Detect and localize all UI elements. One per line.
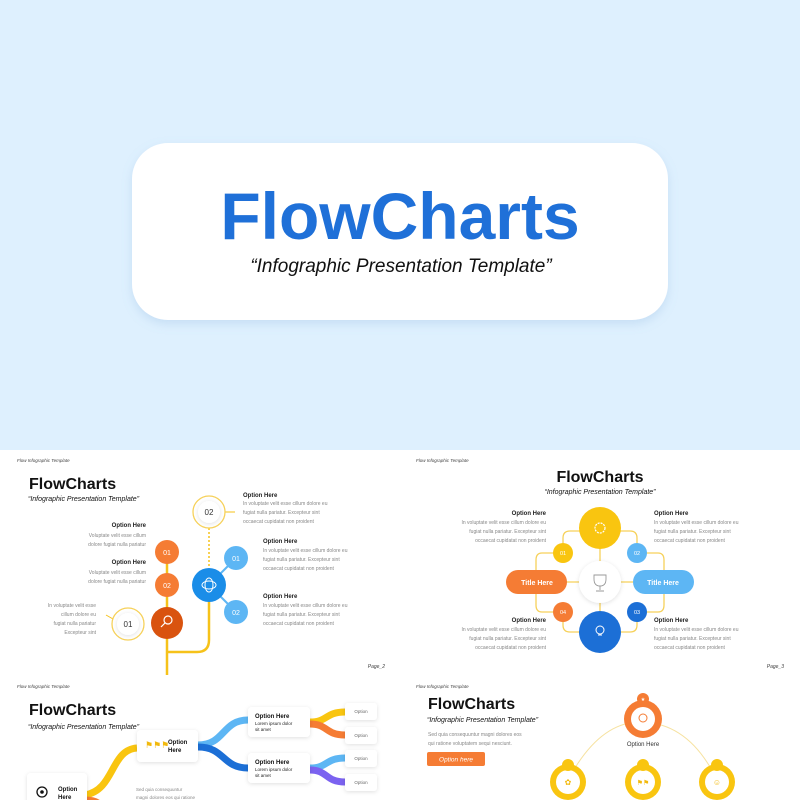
slide 2 text blocks: occaecat cupidatat non proident xyxy=(654,538,725,544)
box: left option: Option xyxy=(58,787,78,793)
slide 2: cycle flow: Page_3 xyxy=(767,664,784,670)
slide 2: cycle flow: “Infographic Presentation Template” xyxy=(544,489,656,496)
slide 2: cycle flow xyxy=(416,458,784,670)
numbered dots: 02 xyxy=(634,551,640,557)
numbered dots xyxy=(553,543,647,622)
slide 1 text blocks: In voluptate velit esse cillum dolore eu xyxy=(263,548,348,554)
circle 02 outline: 02 xyxy=(205,508,214,517)
hero title: FlowCharts xyxy=(220,179,580,253)
yellow nodes xyxy=(550,759,735,800)
hero background xyxy=(0,0,800,450)
slide 2 text blocks: In voluptate velit esse cillum dolore eu xyxy=(654,627,739,633)
pill blue xyxy=(633,570,694,594)
slide 4: hierarchy flow: qui ratione voluptatem sequi nesciunt. xyxy=(428,741,512,747)
slide 2: cycle flow: Flow Infographic Template xyxy=(416,458,469,463)
orange circles xyxy=(151,540,183,639)
slide 3 paragraph: Sed quia consequuntur xyxy=(136,787,183,792)
top orange node xyxy=(624,693,662,748)
slide 1 text blocks: Option Here xyxy=(112,560,147,566)
hero card xyxy=(132,143,668,320)
box: main option: Here xyxy=(168,748,182,754)
slide 1 text blocks: fugiat nulla pariatur. Excepteur sint xyxy=(263,612,340,618)
blue hub: 01 xyxy=(232,556,240,563)
slide 2 text blocks: Option Here xyxy=(654,511,689,517)
slide 1 text blocks: Voluptate velit esse cillum xyxy=(89,570,146,576)
small option boxes: Option xyxy=(354,780,368,785)
box: main option: Option xyxy=(168,740,188,746)
slide 3: branching flow: Flow Infographic Template xyxy=(17,684,70,689)
slide 3 paragraph xyxy=(136,787,196,800)
slide 2 text blocks: fugiat nulla pariatur. Excepteur sint xyxy=(469,529,547,535)
slide 1: timeline flow: Page_2 xyxy=(368,664,385,670)
bottom blue circle xyxy=(579,611,621,653)
slide 2 text blocks: Option Here xyxy=(512,618,547,624)
slide 4: hierarchy flow xyxy=(416,684,735,800)
slide 1 text blocks: In voluptate velit esse cillum dolore eu xyxy=(263,603,348,609)
slide 1: timeline flow xyxy=(17,458,385,675)
orange circles: 01 xyxy=(163,550,171,557)
connectors xyxy=(166,552,168,675)
box: left option xyxy=(27,773,87,800)
slide 1 text blocks: fugiat nulla pariatur xyxy=(53,621,96,627)
slide 1 text blocks xyxy=(48,493,348,636)
small option boxes: Option xyxy=(354,709,368,714)
slide 4: hierarchy flow: “Infographic Presentation Template” xyxy=(427,717,539,724)
slide 1 text blocks: Voluptate velit esse cillum xyxy=(89,533,146,539)
box: lorem 2: Lorem ipsum dolor xyxy=(255,767,293,772)
box: lorem 1 xyxy=(248,707,310,737)
circle 01 outline: 01 xyxy=(124,620,133,629)
top orange node: Option Here xyxy=(627,742,660,748)
button xyxy=(427,752,485,766)
slide 2 text blocks: fugiat nulla pariatur. Excepteur sint xyxy=(469,636,547,642)
yellow nodes: ✿ xyxy=(565,778,572,787)
top yellow circle xyxy=(579,507,621,549)
small option boxes: Option xyxy=(354,733,368,738)
numbered dots: 01 xyxy=(560,551,566,557)
center trophy xyxy=(579,561,621,603)
small option boxes xyxy=(345,703,377,791)
slide 1 text blocks: fugiat nulla pariatur. Excepteur sint xyxy=(243,510,320,516)
slide 3: branching flow xyxy=(17,684,377,800)
slide 1 text blocks: occaecat cupidatat non proident xyxy=(263,621,334,627)
box: lorem 1: Lorem ipsum dolor xyxy=(255,721,293,726)
slide 1 text blocks: occaecat cupidatat non proident xyxy=(243,519,314,525)
slide 1 text blocks: dolore fugiat nulla pariatur xyxy=(88,542,146,548)
slide 4: hierarchy flow: Sed quia consequuntur magni dolores eos xyxy=(428,732,522,738)
pill blue: Title Here xyxy=(647,580,679,587)
arc connectors xyxy=(568,722,717,780)
slide 2 text blocks: Option Here xyxy=(654,618,689,624)
slide 2 text blocks: occaecat cupidatat non proident xyxy=(475,645,547,651)
button: Option here xyxy=(439,756,473,764)
slide 4: hierarchy flow: Flow Infographic Template xyxy=(416,684,469,689)
slide 2 text blocks: In voluptate velit esse cillum dolore eu xyxy=(462,520,546,526)
slide 2 text blocks: fugiat nulla pariatur. Excepteur sint xyxy=(654,529,731,535)
slide 2 text blocks: occaecat cupidatat non proident xyxy=(654,645,725,651)
slide 1 text blocks: Option Here xyxy=(263,539,298,545)
slide 1: timeline flow: Flow Infographic Template xyxy=(17,458,70,463)
box: lorem 1: sit amet xyxy=(255,727,272,732)
slide 3 title: FlowCharts xyxy=(29,702,116,719)
slide 1 text blocks: occaecat cupidatat non proident xyxy=(263,566,334,572)
yellow nodes: ☺ xyxy=(713,778,721,787)
orange circles: 02 xyxy=(163,583,171,590)
slide 3 paragraph: magni dolores eos qui ratione xyxy=(136,795,196,800)
pill orange: Title Here xyxy=(521,580,553,587)
slide 2 text blocks: Option Here xyxy=(512,511,547,517)
yellow nodes: ⚑⚑ xyxy=(637,779,649,787)
slide 2 text blocks: In voluptate velit esse cillum dolore eu xyxy=(462,627,546,633)
box: lorem 2: Option Here xyxy=(255,760,290,766)
slide 1 text blocks: In voluptate velit esse cillum dolore eu xyxy=(243,501,328,507)
slide 1 text blocks: fugiat nulla pariatur. Excepteur sint xyxy=(263,557,340,563)
numbered dots: 04 xyxy=(560,610,566,616)
hero subtitle: “Infographic Presentation Template” xyxy=(250,256,553,277)
circle 01 outline xyxy=(112,608,144,640)
slide 1 text blocks: Option Here xyxy=(263,594,298,600)
pill orange xyxy=(506,570,567,594)
slide 1 text blocks: Option Here xyxy=(112,523,147,529)
box: main option xyxy=(137,730,198,762)
slide 2 title: FlowCharts xyxy=(556,469,644,486)
slide 2 text blocks: fugiat nulla pariatur. Excepteur sint xyxy=(654,636,731,642)
box: lorem 1: Option Here xyxy=(255,714,290,720)
yellow loop xyxy=(536,531,664,632)
box: lorem 2: sit amet xyxy=(255,773,272,778)
circle 02 outline xyxy=(193,496,225,528)
slide 1 text blocks: Option Here xyxy=(243,493,278,499)
slide 4 title: FlowCharts xyxy=(428,696,515,713)
slide 1 text blocks: dolore fugiat nulla pariatur xyxy=(88,579,146,585)
slide 1 text blocks: Excepteur sint xyxy=(64,630,97,636)
box: main option: ⚑⚑⚑ xyxy=(145,740,169,750)
slide 1 title: FlowCharts xyxy=(29,476,116,493)
slide 1 text blocks: In voluptate velit esse xyxy=(48,603,96,609)
ribbons xyxy=(85,712,345,800)
box: lorem 2 xyxy=(248,753,310,783)
blue hub: 02 xyxy=(232,610,240,617)
slide 2 text blocks: In voluptate velit esse cillum dolore eu xyxy=(654,520,739,526)
numbered dots: 03 xyxy=(634,610,640,616)
small option boxes: Option xyxy=(354,756,368,761)
slide 3: branching flow: “Infographic Presentation Template” xyxy=(28,724,140,731)
slide 1: timeline flow: “Infographic Presentation Template” xyxy=(28,496,140,503)
blue hub xyxy=(192,546,248,624)
slide 1 text blocks: cillum dolore eu xyxy=(61,612,96,618)
top orange node: ★ xyxy=(641,697,646,703)
slide 2 text blocks: occaecat cupidatat non proident xyxy=(475,538,547,544)
slide 2 text blocks xyxy=(462,511,739,651)
